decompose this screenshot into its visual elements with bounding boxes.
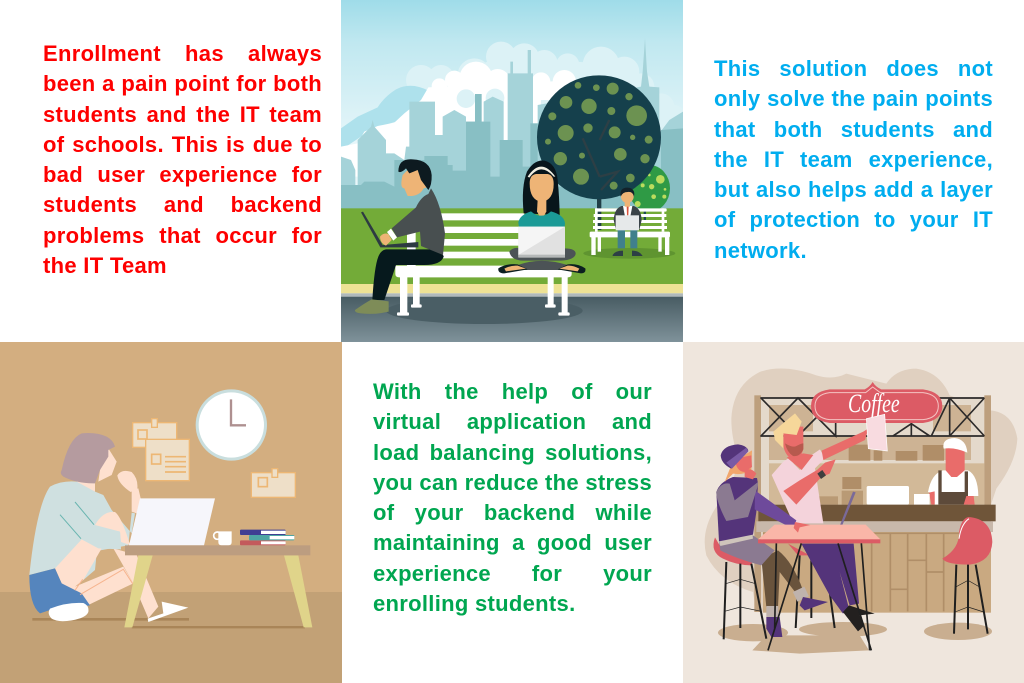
slippers bbox=[49, 602, 188, 622]
text block: enrollment pain point: Enrollment has always bbox=[43, 41, 322, 66]
leg creases bbox=[75, 569, 133, 595]
shirt bbox=[29, 481, 135, 580]
floor shadows bbox=[32, 618, 305, 628]
counter bbox=[756, 505, 996, 613]
truss frame bbox=[760, 398, 984, 436]
laptop on table bbox=[802, 492, 856, 533]
text block: virtual application solution: enrolling students. bbox=[373, 591, 576, 616]
pale clouds bbox=[406, 42, 684, 167]
knee bbox=[95, 512, 130, 545]
kiosk back bbox=[754, 395, 991, 612]
panel: woman at laptop illustration bbox=[0, 342, 342, 683]
woman stool bbox=[713, 537, 766, 639]
text block: enrollment pain point: of schools. This is due to bbox=[43, 132, 322, 157]
light arcs in the clouds bbox=[457, 89, 504, 108]
shirt folds bbox=[60, 502, 94, 539]
wall clock bbox=[196, 389, 267, 461]
text block: virtual application solution: virtual application and bbox=[373, 409, 652, 434]
background bbox=[683, 342, 1024, 683]
text block: solution benefits: but also helps add a layer bbox=[714, 177, 993, 202]
text block: enrollment pain point: problems that occur for bbox=[43, 223, 322, 248]
stack of books bbox=[240, 530, 294, 545]
sky bbox=[341, 0, 683, 213]
main bench bbox=[395, 213, 572, 316]
text block: solution benefits: that both students and bbox=[714, 117, 993, 142]
text block: virtual application solution: experience for your bbox=[373, 561, 652, 586]
near thigh bbox=[63, 567, 133, 605]
coffee cup bbox=[214, 531, 232, 545]
barista bbox=[928, 438, 978, 505]
wall bbox=[0, 342, 342, 592]
text block: virtual application solution: maintaining a good user bbox=[373, 530, 652, 555]
panel: coffee shop illustration bbox=[683, 342, 1024, 683]
text block: virtual application solution: of your backend while bbox=[373, 500, 652, 525]
text block: enrollment pain point: the IT Team bbox=[43, 253, 167, 278]
far shin bbox=[113, 548, 158, 618]
woman bbox=[29, 433, 188, 622]
small man with laptop bbox=[613, 188, 643, 256]
back bench shadow bbox=[583, 248, 675, 259]
text block: enrollment pain point: students and backend bbox=[43, 192, 322, 217]
shorts bbox=[29, 568, 90, 613]
hair bbox=[61, 433, 115, 483]
table bbox=[124, 545, 312, 627]
floor shadows bbox=[718, 622, 992, 654]
small green tree bbox=[629, 165, 670, 220]
sticky note 2 bbox=[146, 439, 189, 481]
cafe table bbox=[758, 525, 880, 650]
midriff bbox=[55, 539, 102, 595]
text block: solution benefits: of protection to your IT bbox=[714, 207, 993, 232]
text block: solution benefits: only solve the pain points bbox=[714, 86, 993, 111]
text block: enrollment pain point: been a pain point for both bbox=[43, 71, 322, 96]
text block: solution benefits bbox=[714, 56, 993, 263]
sign text: Coffee bbox=[848, 388, 900, 418]
right stool bbox=[942, 517, 992, 634]
text block: virtual application solution: you can reduce the stress bbox=[373, 470, 652, 495]
man in white t-shirt bbox=[772, 413, 875, 631]
blue cloud bbox=[341, 86, 434, 150]
woman in hat bbox=[716, 444, 828, 637]
man stool bbox=[796, 555, 835, 628]
grass bbox=[341, 208, 683, 284]
panel: park illustration bbox=[341, 0, 683, 342]
register and counter top items bbox=[867, 486, 930, 505]
road bbox=[341, 297, 683, 342]
skyline back bbox=[341, 38, 683, 213]
text block: virtual application solution bbox=[373, 379, 652, 616]
sticky note 3 bbox=[251, 469, 295, 497]
man on the left with laptop bbox=[355, 159, 445, 314]
neck and face bbox=[77, 448, 117, 492]
paper held up bbox=[866, 414, 887, 451]
white clouds bbox=[341, 62, 581, 177]
woman with laptop bbox=[498, 161, 585, 273]
woman hand on table bbox=[794, 522, 810, 533]
sticky note 1 bbox=[133, 419, 177, 447]
blob bbox=[705, 369, 1017, 612]
text block: enrollment pain point bbox=[43, 41, 322, 278]
path edge bbox=[341, 284, 683, 293]
text block: virtual application solution: load balancing solutions, bbox=[373, 440, 652, 465]
big round tree bbox=[537, 75, 661, 230]
skyline front bbox=[341, 94, 683, 213]
forearm and fist bbox=[117, 471, 141, 513]
coffee sign bbox=[811, 382, 942, 423]
text block: enrollment pain point: students and the IT team bbox=[43, 102, 322, 127]
text block: solution benefits: the IT team experience, bbox=[714, 147, 993, 172]
bench shadow bbox=[386, 297, 583, 324]
text block: enrollment pain point: bad user experience for bbox=[43, 162, 322, 187]
text block: virtual application solution: With the help of our bbox=[373, 379, 652, 404]
floor bbox=[0, 592, 342, 683]
back bench bbox=[590, 208, 670, 255]
laptop bbox=[129, 498, 215, 545]
sleeve bbox=[82, 527, 121, 549]
text block: solution benefits: network. bbox=[714, 238, 807, 263]
text block: solution benefits: This solution does not bbox=[714, 56, 993, 81]
